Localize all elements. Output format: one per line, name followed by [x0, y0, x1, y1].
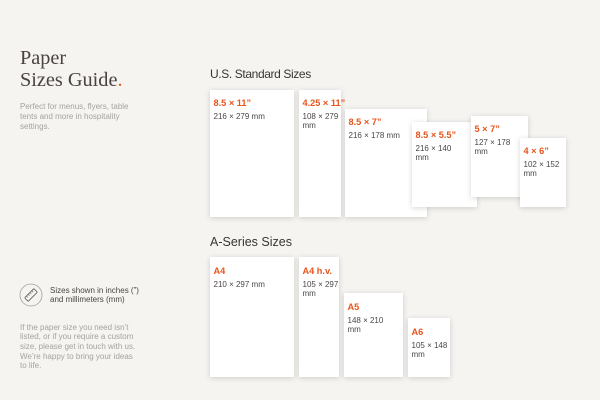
intro text: settings.	[20, 122, 50, 131]
card: 8.5 x 5.5: 8.5 × 5.5”	[416, 130, 456, 140]
contact text: We’re happy to bring your ideas	[20, 352, 133, 361]
card: 5 x 7	[471, 116, 528, 197]
intro text: Perfect for menus, flyers, table	[20, 102, 128, 111]
card: 4 x 6: mm	[524, 168, 537, 178]
contact text	[20, 322, 135, 370]
card: 8.5 x 7	[345, 109, 427, 217]
contact text: to life.	[20, 361, 41, 370]
card: 8.5 x 5.5: mm	[416, 152, 429, 162]
card: A5: mm	[348, 325, 361, 334]
intro text: tents and more in hospitality	[20, 112, 120, 121]
card: A4 h.v.: 105 × 297	[302, 280, 338, 289]
icon: ruler	[20, 284, 42, 306]
card: 4.25 x 11: 108 × 279	[302, 112, 338, 120]
title: Paper	[20, 47, 66, 69]
card: 4 x 6	[520, 138, 566, 207]
contact text: size, please get in touch with us.	[20, 342, 135, 351]
card: 8.5 x 5.5: 216 × 140	[416, 144, 451, 152]
units note: and millimeters (mm)	[50, 295, 125, 304]
card: 5 x 7: mm	[474, 146, 488, 156]
card: A4 h.v.	[299, 257, 339, 377]
card: A5: 148 × 210	[348, 316, 383, 325]
card: 8.5 x 11: 8.5 × 11”	[214, 98, 251, 108]
card: 4.25 x 11: 4.25 × 11”	[302, 98, 345, 108]
card: 8.5 x 11	[210, 90, 294, 217]
card: A6: mm	[412, 350, 425, 359]
card: A6	[408, 318, 450, 377]
card: 5 x 7: 5 × 7”	[474, 124, 500, 134]
card: 8.5 x 7: 216 × 178 mm	[348, 130, 400, 140]
card: 5 x 7: 127 × 178	[474, 138, 510, 146]
card: A4: A4	[214, 266, 225, 276]
card: A4	[210, 257, 294, 377]
card: 4 x 6: 102 × 152	[524, 160, 559, 168]
intro text	[20, 102, 128, 131]
card: 4.25 x 11: mm	[302, 120, 316, 130]
heading: A-Series Sizes: A-Series Sizes	[210, 234, 292, 248]
contact text: If the paper size you need isn’t	[20, 322, 129, 332]
heading: U.S. Standard Sizes: U.S. Standard Sizes	[210, 67, 311, 81]
contact text: listed, or if you require a custom	[20, 332, 133, 341]
card: 4.25 x 11	[299, 90, 341, 217]
card: 8.5 x 7: 8.5 × 7”	[348, 116, 381, 126]
card: A6: A6	[412, 326, 423, 336]
card: 8.5 x 5.5	[412, 122, 477, 207]
card: 4 x 6: 4 × 6”	[524, 146, 549, 156]
units note	[50, 286, 139, 304]
card: A6: 105 × 148	[412, 341, 447, 350]
card: A4 h.v.: mm	[302, 289, 316, 298]
card: A5: A5	[348, 302, 359, 312]
units note: Sizes shown in inches (”)	[50, 286, 139, 294]
card: 8.5 x 11: 216 × 279 mm	[214, 112, 265, 120]
card: A4: 210 × 297 mm	[214, 280, 265, 289]
title: Sizes Guide.	[20, 69, 123, 91]
card: A4 h.v.: A4 h.v.	[302, 266, 332, 276]
title	[20, 47, 123, 91]
card: A5	[344, 293, 403, 377]
